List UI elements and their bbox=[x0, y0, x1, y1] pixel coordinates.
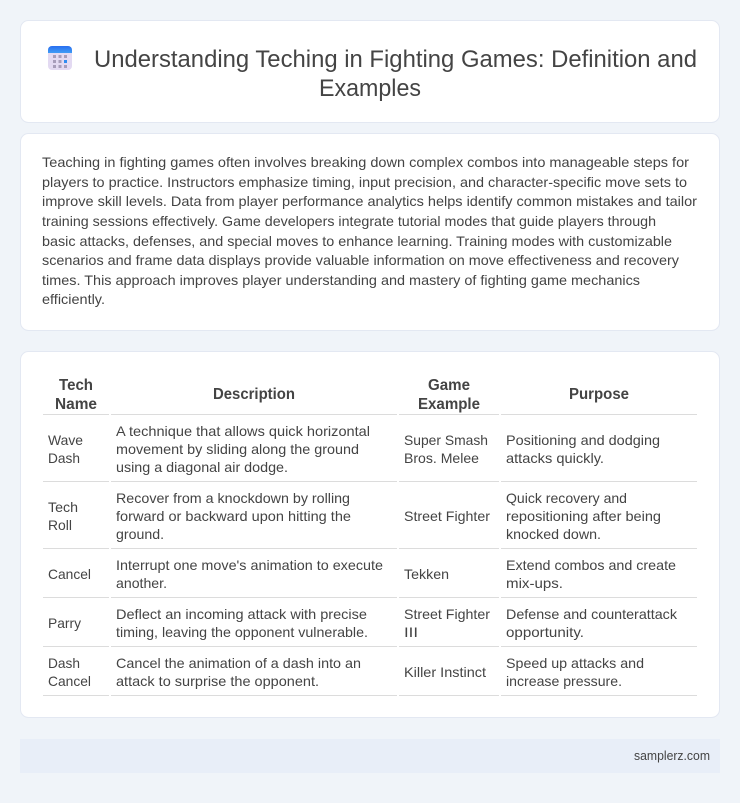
row: Cancel: Tekken bbox=[404, 566, 449, 582]
row: Cancel: another. bbox=[116, 575, 167, 591]
table header row: Description bbox=[213, 386, 295, 403]
title bbox=[94, 46, 697, 102]
row: Parry: timing, leaving the opponent vulnerable. bbox=[116, 624, 368, 640]
row: Cancel: Extend combos and create bbox=[506, 557, 676, 573]
row: Dash Cancel: increase pressure. bbox=[506, 673, 622, 689]
row: Tech Roll: Tech bbox=[48, 499, 78, 515]
panel: intro text: players to practice. Instructors emphasize timing, input precision, and character-specific move sets to bbox=[42, 174, 687, 190]
row: Dash Cancel: Cancel bbox=[48, 673, 91, 689]
row: Tech Roll: ground. bbox=[116, 526, 164, 542]
panel: intro text: training sessions effectively. Game developers integrate tutorial modes that guide players through bbox=[42, 213, 656, 229]
row: Tech Roll: forward or backward upon hitting the bbox=[116, 508, 351, 524]
row: Cancel: Interrupt one move's animation to execute bbox=[116, 557, 383, 573]
panel: tech table bbox=[20, 352, 720, 718]
table header row bbox=[55, 377, 629, 413]
table header row: Purpose bbox=[569, 386, 629, 403]
row: Wave Dash: Bros. Melee bbox=[404, 450, 479, 466]
row: Wave Dash: Wave bbox=[48, 432, 83, 448]
row: Wave Dash: A technique that allows quick horizontal bbox=[116, 423, 370, 439]
row: Tech Roll bbox=[48, 490, 661, 542]
title: Understanding Teching in Fighting Games: Definition and bbox=[94, 46, 697, 73]
row: Cancel bbox=[48, 557, 676, 591]
table header row: Name bbox=[55, 396, 97, 413]
row: Wave Dash: Dash bbox=[48, 450, 80, 466]
row: Wave Dash: Super Smash bbox=[404, 432, 488, 448]
row: Dash Cancel: attack to surprise the opponent. bbox=[116, 673, 319, 689]
title: Examples bbox=[319, 75, 421, 102]
row: Tech Roll: repositioning after being bbox=[506, 508, 661, 524]
row: Wave Dash: Positioning and dodging bbox=[506, 432, 660, 448]
row: Dash Cancel: Killer Instinct bbox=[404, 664, 486, 680]
row: Dash Cancel: Speed up attacks and bbox=[506, 655, 644, 671]
row: Dash Cancel: Dash bbox=[48, 655, 80, 671]
row: Parry bbox=[48, 606, 678, 640]
panel: intro text: efficiently. bbox=[42, 291, 105, 307]
row: Parry: Defense and counterattack bbox=[506, 606, 678, 622]
row: Dash Cancel bbox=[48, 655, 644, 689]
row: Parry: III bbox=[404, 624, 418, 640]
row: Cancel: mix-ups. bbox=[506, 575, 563, 591]
footer: samplerz.com bbox=[634, 749, 710, 763]
panel: intro text: times. This approach improves player understanding and mastery of fighting game mechanics bbox=[42, 272, 640, 288]
panel: intro text: improve skill levels. Data from player performance analytics helps identify common mistakes and tailor bbox=[42, 193, 697, 209]
row: Tech Roll: Quick recovery and bbox=[506, 490, 627, 506]
panel: intro text: Teaching in fighting games often involves breaking down complex combos into manageable steps for bbox=[42, 154, 689, 170]
icon: calendar bbox=[48, 46, 72, 70]
panel: header bbox=[20, 20, 720, 122]
row: Tech Roll: Roll bbox=[48, 517, 72, 533]
row: Cancel: Cancel bbox=[48, 566, 91, 582]
row: Wave Dash bbox=[48, 423, 660, 475]
footer bbox=[20, 739, 720, 773]
row: Parry: Parry bbox=[48, 615, 81, 631]
row: Wave Dash: attacks quickly. bbox=[506, 450, 604, 466]
row: Wave Dash: using a diagonal air dodge. bbox=[116, 459, 288, 475]
table header row: Game bbox=[428, 377, 470, 394]
table header row: Example bbox=[418, 396, 480, 413]
row: Parry: opportunity. bbox=[506, 624, 584, 640]
row: Parry: Deflect an incoming attack with precise bbox=[116, 606, 367, 622]
row: Wave Dash: movement by sliding along the ground bbox=[116, 441, 359, 457]
panel: intro text: basic attacks, defenses, and special moves to enhance learning. Training modes with customizable bbox=[42, 233, 672, 249]
panel: intro text: scenarios and frame data displays provide valuable information on move effectiveness and recovery bbox=[42, 252, 679, 268]
table header row: Tech bbox=[59, 377, 93, 394]
row: Tech Roll: Recover from a knockdown by rolling bbox=[116, 490, 350, 506]
row: Parry: Street Fighter bbox=[404, 606, 490, 622]
panel: intro text bbox=[20, 134, 720, 330]
row: Dash Cancel: Cancel the animation of a dash into an bbox=[116, 655, 361, 671]
row: Tech Roll: Street Fighter bbox=[404, 508, 490, 524]
row: Tech Roll: knocked down. bbox=[506, 526, 601, 542]
